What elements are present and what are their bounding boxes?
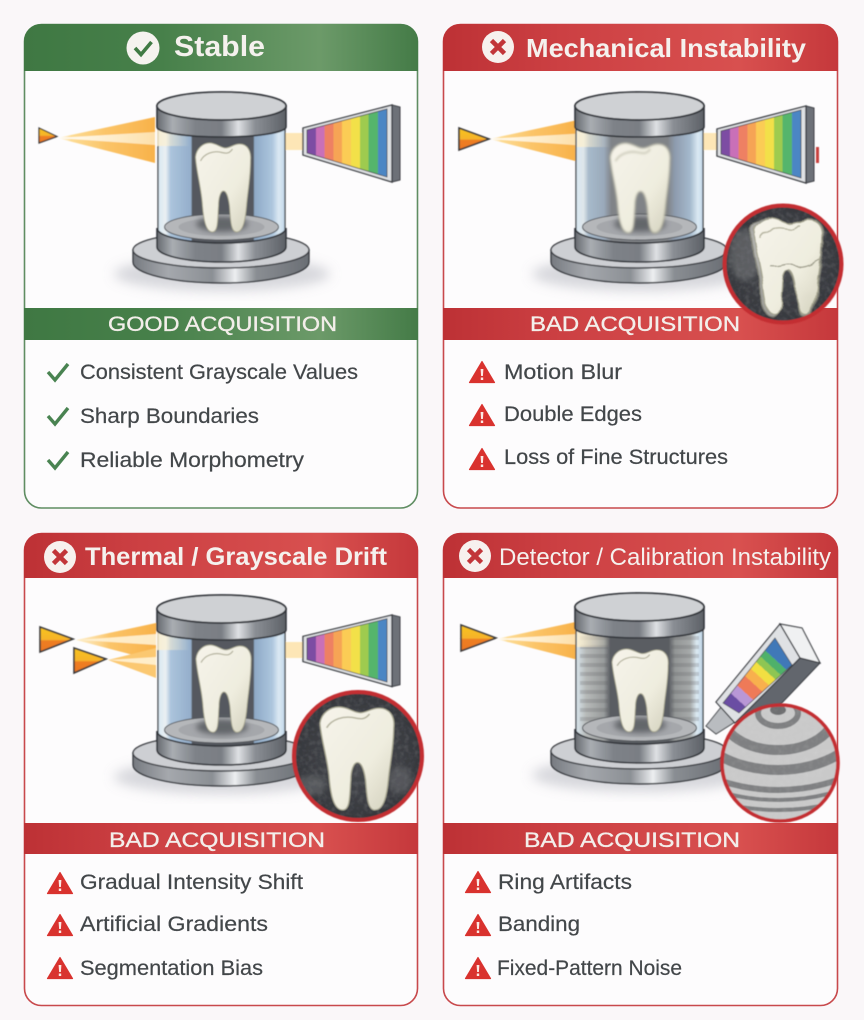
tooth xyxy=(196,143,251,232)
x-ray beam xyxy=(57,117,155,163)
scanner stage base xyxy=(114,232,330,291)
header: Stable: Stable xyxy=(174,31,265,63)
list: motion problems xyxy=(470,361,728,470)
detector arm xyxy=(706,706,738,734)
list: good results xyxy=(48,361,358,472)
list: drift problems: Artificial Gradients xyxy=(80,913,268,936)
illustration: scanner with wobble xyxy=(459,92,819,291)
glass cylinder xyxy=(576,122,703,245)
panel: thermal drift xyxy=(24,533,422,1006)
top cap xyxy=(157,595,286,640)
x-ray beams xyxy=(76,623,156,661)
x-ray source xyxy=(39,128,57,143)
list: detector problems: Banding xyxy=(498,913,580,936)
x-ray source 1 xyxy=(40,627,73,652)
scanner stage base xyxy=(532,232,748,291)
ring stripes on glass xyxy=(580,629,699,726)
list: motion problems: Motion Blur xyxy=(504,361,622,384)
list: detector problems: Ring Artifacts xyxy=(498,871,632,894)
beam core streaks xyxy=(80,634,156,665)
glass cylinder xyxy=(158,625,285,748)
tooth xyxy=(196,645,251,732)
list: drift problems xyxy=(48,871,303,980)
banner: bad acquisition: BAD ACQUISITION xyxy=(530,313,740,336)
banner: bad acquisition xyxy=(443,823,838,854)
list: detector problems: Fixed-Pattern Noise xyxy=(497,957,682,980)
detector xyxy=(717,106,814,183)
exit beam xyxy=(280,133,304,150)
list: good results: Sharp Boundaries xyxy=(80,405,259,428)
detector xyxy=(303,105,400,182)
list: drift problems: Gradual Intensity Shift xyxy=(80,871,303,894)
glass cylinder xyxy=(158,122,285,245)
list: motion problems: Loss of Fine Structures xyxy=(504,446,728,469)
header: Thermal / Grayscale Drift: Thermal / Grayscale Drift xyxy=(85,543,388,571)
header: Mechanical Instability xyxy=(443,24,838,71)
top cap xyxy=(575,92,704,137)
banner: bad acquisition: BAD ACQUISITION xyxy=(109,829,325,852)
sample platform xyxy=(164,717,278,743)
tilted detector xyxy=(716,624,820,723)
top cap xyxy=(575,593,704,638)
list: good results: Consistent Grayscale Values xyxy=(80,361,358,384)
sample platform xyxy=(582,715,696,741)
inset lens: motion blur tooth xyxy=(723,204,843,324)
header: Mechanical Instability: Mechanical Instability xyxy=(526,33,807,63)
lower collar xyxy=(157,228,286,262)
header: Detector / Calibration Instability xyxy=(443,533,838,578)
beam glow in glass xyxy=(577,131,610,147)
banner: bad acquisition: BAD ACQUISITION xyxy=(524,829,740,852)
list: drift problems: Segmentation Bias xyxy=(80,957,263,980)
second x-ray beam xyxy=(108,648,156,678)
detector xyxy=(303,615,400,687)
x-ray source xyxy=(459,128,489,150)
header: Detector / Calibration Instability: Detector / Calibration Instability xyxy=(499,544,831,571)
lower collar xyxy=(575,729,704,763)
lower collar xyxy=(157,731,286,765)
list: motion problems: Double Edges xyxy=(504,403,642,426)
banner: good acquisition: GOOD ACQUISITION xyxy=(108,313,337,336)
lower collar xyxy=(575,228,704,262)
beam glow in glass xyxy=(577,631,610,647)
illustration: scanner with tilted detector xyxy=(461,593,820,792)
banner: bad acquisition xyxy=(443,308,838,340)
x-ray source xyxy=(461,625,496,651)
illustration: stable scanner xyxy=(39,92,400,291)
scanner stage base xyxy=(532,733,748,792)
panel: stable xyxy=(24,24,418,508)
blurred tooth xyxy=(610,143,670,233)
header: Thermal / Grayscale Drift xyxy=(24,533,418,578)
beam glow in glass xyxy=(157,130,190,146)
header: Stable xyxy=(24,24,418,71)
exit beam xyxy=(280,642,304,658)
panel: detector calibration xyxy=(443,533,864,1006)
top cap xyxy=(157,92,286,137)
list: good results: Reliable Morphometry xyxy=(80,449,305,472)
list: detector problems xyxy=(466,871,682,980)
banner: good acquisition xyxy=(24,308,418,340)
exit beam xyxy=(695,133,720,150)
x-ray beam xyxy=(489,121,575,161)
detector red tick xyxy=(816,147,819,163)
inset lens: ring artifacts xyxy=(720,702,841,823)
x-ray beam xyxy=(496,622,575,659)
sample platform xyxy=(164,214,278,240)
inset lens: tooth with gradient xyxy=(294,692,422,820)
scanner stage base xyxy=(114,735,330,794)
sample platform xyxy=(582,214,696,240)
banner: bad acquisition xyxy=(24,823,418,854)
x-ray source 2 xyxy=(74,648,106,673)
illustration: scanner with double source xyxy=(40,595,400,794)
beam glow in glass xyxy=(157,632,190,650)
panel: mechanical instability xyxy=(443,24,843,508)
tooth xyxy=(612,649,668,732)
glass cylinder xyxy=(576,623,703,746)
